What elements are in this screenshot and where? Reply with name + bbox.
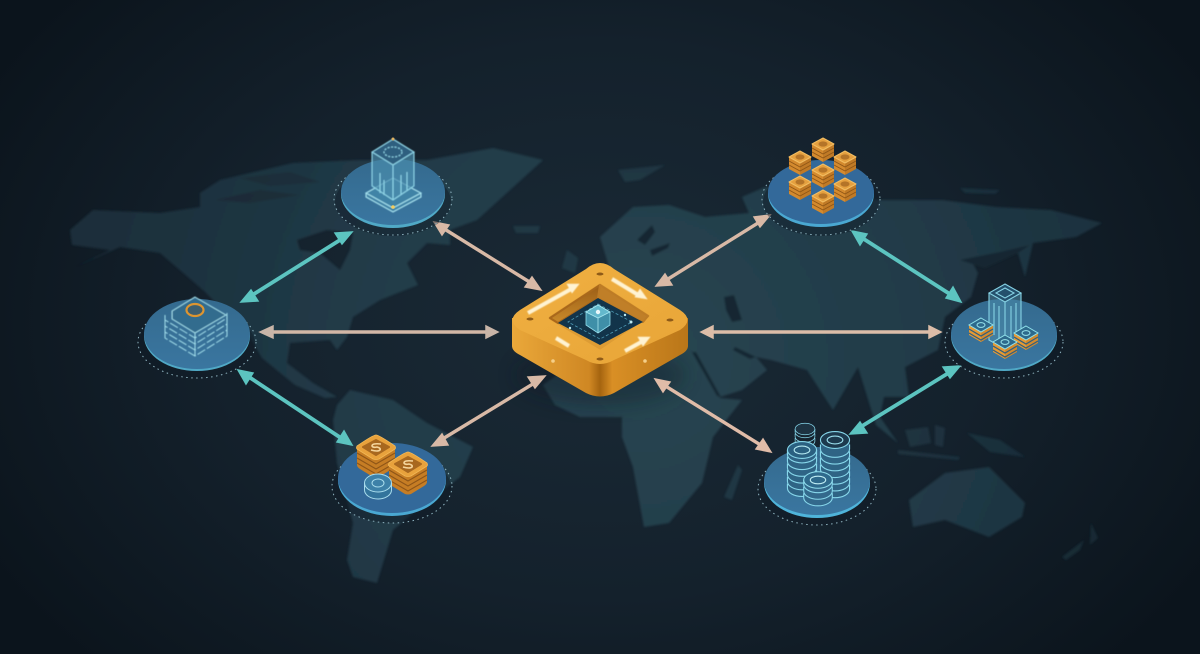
icon: layered blueprint stack <box>165 297 227 356</box>
arrow: west to north-west node <box>241 232 352 302</box>
arrow: north-east to east node <box>852 231 961 302</box>
inland seas <box>215 172 1030 397</box>
node: south-west gold coins <box>332 435 452 523</box>
node: east towers and blocks <box>945 284 1063 378</box>
hub rivets <box>526 272 674 360</box>
icon: tall coin stack <box>820 432 850 498</box>
arrow: west node to hub <box>260 326 498 338</box>
hub shadow <box>515 345 685 405</box>
arrow: west to south-west node <box>238 370 352 445</box>
node: north-east gold blocks <box>762 138 880 236</box>
icon: small coin stack <box>795 423 815 447</box>
icon: server blocks <box>969 318 1038 359</box>
continent: Australia <box>909 467 1025 537</box>
arrow: south-east node to hub <box>655 379 771 452</box>
node: south-east coin stacks <box>758 423 876 525</box>
icon: chip cube <box>586 305 610 333</box>
hub well <box>550 285 648 348</box>
world map <box>70 148 1102 583</box>
connection arrows <box>238 215 961 452</box>
arrow: north-west node to hub <box>434 222 541 290</box>
continent: Africa <box>543 345 742 527</box>
icon: gold stacks <box>356 435 428 494</box>
hub top arrows <box>528 279 650 351</box>
icon: medium coin stack <box>787 442 817 496</box>
islands <box>513 165 1098 560</box>
node: north-west server tower <box>334 138 452 236</box>
central hub <box>512 263 688 396</box>
hub top face <box>512 263 688 364</box>
hub screen <box>558 298 643 345</box>
node: west layered server <box>138 297 256 378</box>
arrow: north-east node to hub <box>656 215 770 286</box>
icon: amber ring <box>186 304 204 316</box>
hub side faces <box>512 318 688 396</box>
arrow: south-east to east node <box>850 366 960 434</box>
icon: blueprint tower <box>366 139 421 212</box>
icon: outlined coin <box>364 474 392 499</box>
icon: front coin stack <box>804 472 832 506</box>
icon: tall blueprint tower <box>989 284 1021 349</box>
arrow: east node to hub <box>701 326 941 338</box>
arrow: south-west node to hub <box>432 376 545 446</box>
continent: North America and Greenland <box>70 148 543 398</box>
icon: gold cube cluster <box>789 138 856 214</box>
continent: Eurasia <box>545 187 1102 443</box>
continent: South America <box>333 390 473 583</box>
